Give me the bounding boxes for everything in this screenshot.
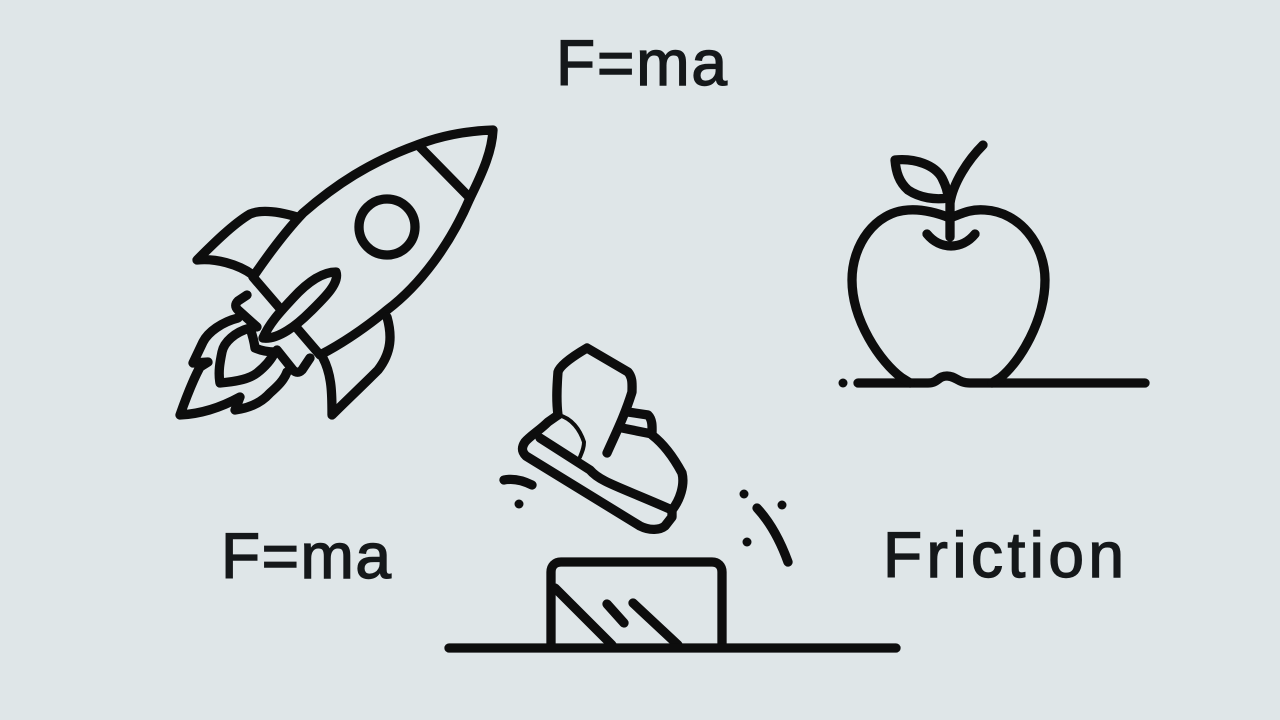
rocket window [359, 199, 415, 255]
icon: rocket [180, 130, 493, 415]
icon: apple [838, 145, 1145, 388]
apple dimple [927, 234, 975, 246]
ground line [449, 643, 896, 653]
shoe toe cap arc [558, 415, 584, 457]
rocket right fin [323, 317, 390, 415]
debris dot 1 [514, 500, 524, 508]
rocket left fin [197, 211, 297, 275]
rocket centre oval [263, 272, 337, 338]
shoe sole top [540, 438, 672, 510]
apple outline [852, 210, 1045, 383]
rocket nozzle [236, 295, 310, 372]
shoe toe [652, 435, 683, 510]
shoe upper [557, 348, 632, 453]
rocket body [253, 130, 493, 355]
icon: shoe and block [449, 348, 896, 648]
rocket outer flame [180, 318, 287, 415]
rocket inner flame [219, 328, 275, 383]
rocket nose divider [420, 147, 470, 198]
apple leaf [895, 160, 948, 199]
heading: F=ma left: F=ma [221, 520, 391, 592]
heading: F=ma top: F=ma [556, 27, 727, 99]
debris dot 3 [778, 500, 786, 510]
motion marks left [504, 479, 532, 485]
block glass strokes [555, 588, 678, 645]
block [551, 562, 722, 647]
debris dot 2 [740, 490, 748, 498]
debris dot 4 [742, 538, 752, 546]
shoe tab [622, 412, 652, 434]
shoe sole outer [522, 415, 672, 529]
apple ground dot [838, 378, 848, 388]
apple stem [950, 145, 983, 237]
heading: Friction: Friction [883, 519, 1124, 591]
motion marks right [757, 508, 788, 562]
apple ground line [858, 376, 1145, 383]
